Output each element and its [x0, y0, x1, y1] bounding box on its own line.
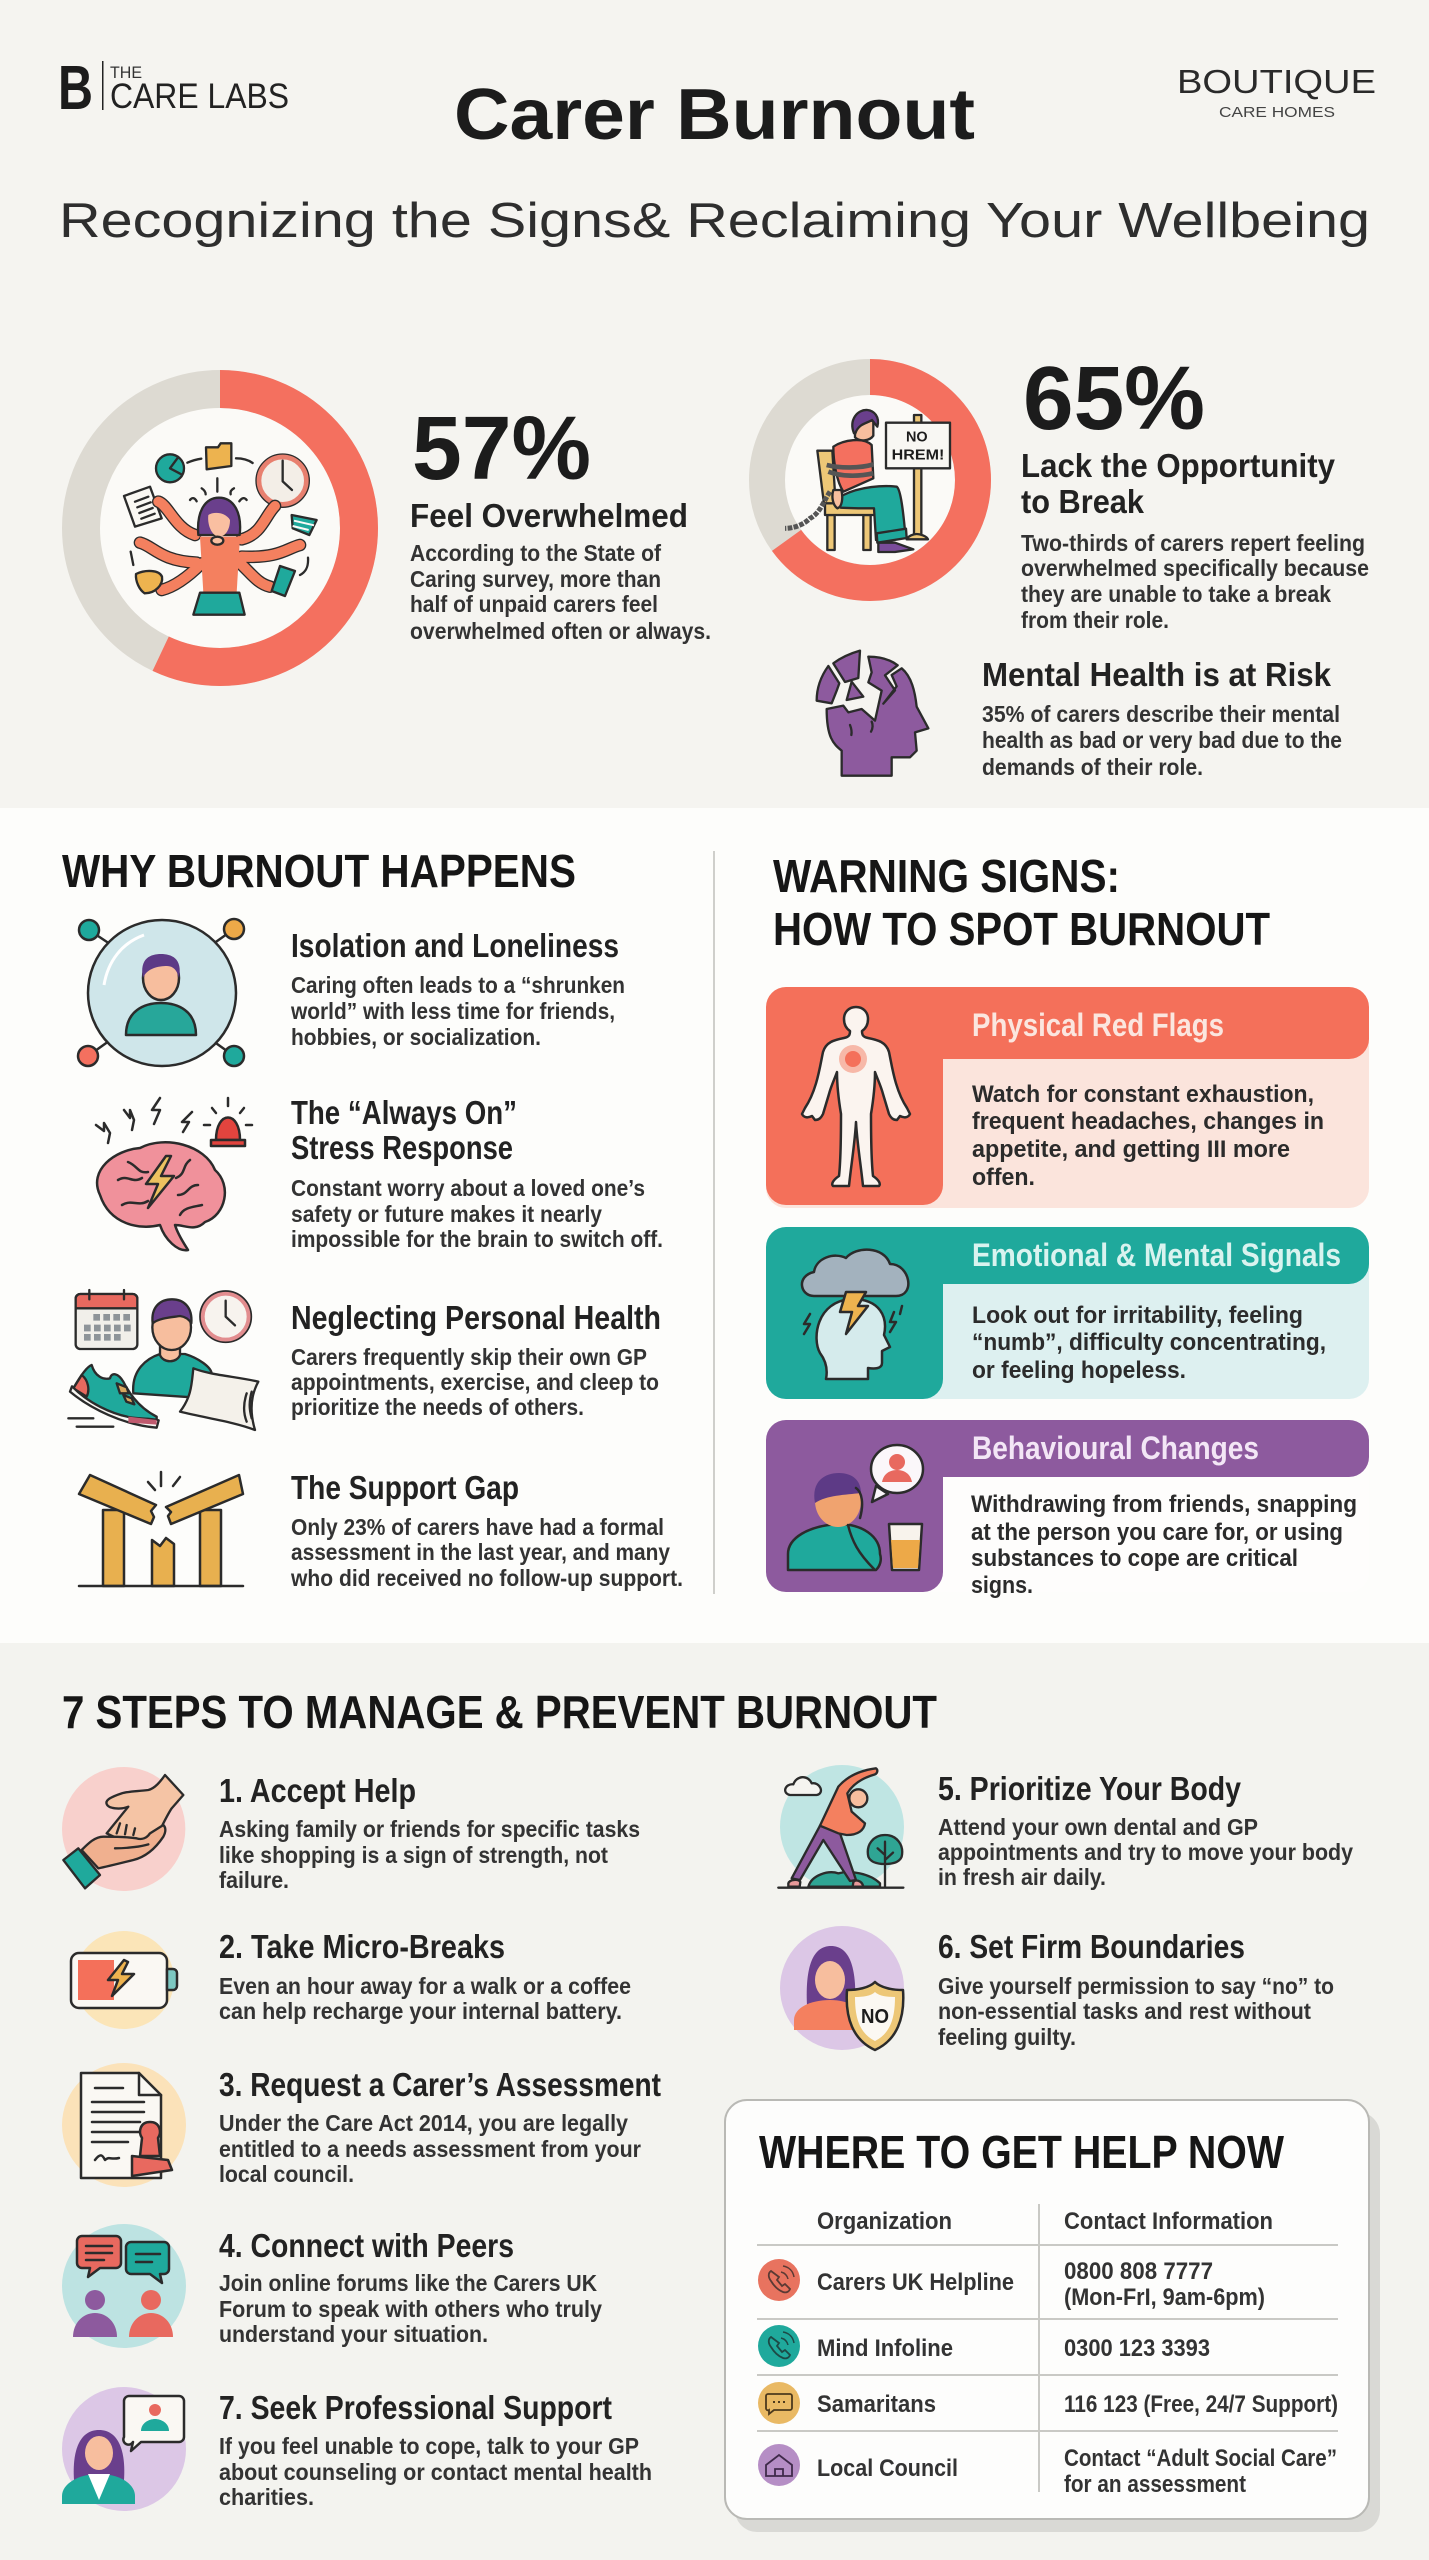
card title: Behavioural Changes	[972, 1430, 1259, 1466]
step text	[219, 2433, 652, 2510]
row: Local Council: Local Council	[817, 2455, 958, 2482]
description: overwhelmed specifically because	[1021, 555, 1369, 581]
icon: person in bubble	[78, 919, 244, 1066]
icon: cracked head	[817, 651, 928, 776]
title: Carer Burnout	[454, 75, 975, 155]
label: Feel Overwhelmed: Feel Overwhelmed	[410, 497, 688, 534]
icon: person tied to chair	[785, 410, 950, 552]
panel: seven steps	[0, 1643, 1429, 2560]
label: Lack the Opportunity to Break: to Break	[1021, 483, 1145, 520]
description	[410, 540, 711, 644]
card title: Emotional & Mental Signals	[972, 1237, 1341, 1273]
description	[290, 972, 625, 1050]
step text: non-essential tasks and rest without	[938, 1998, 1311, 2024]
stat: 57% feel overwhelmed	[81, 389, 711, 667]
step text: Join online forums like the Carers UK	[219, 2270, 597, 2296]
logo: The Care Labs: CARE LABS	[110, 77, 289, 116]
step title: 3. Request a Carer’s Assessment	[219, 2066, 661, 2103]
step 5	[778, 1765, 1353, 1890]
description: Caring often leads to a “shrunken	[291, 972, 625, 998]
step 7	[62, 2387, 652, 2511]
step 1	[62, 1767, 640, 1893]
table header	[817, 2208, 1273, 2235]
stat: mental health at risk	[817, 651, 1342, 780]
icon: counsellor	[62, 2387, 186, 2511]
step text: Under the Care Act 2014, you are legally	[219, 2110, 628, 2136]
description	[982, 701, 1342, 780]
icon: broken bridge	[79, 1472, 243, 1586]
heading: 7 steps: 7 STEPS TO MANAGE & PREVENT BURNOUT	[62, 1686, 937, 1738]
card text: Look out for irritability, feeling	[972, 1302, 1303, 1329]
card text	[972, 1081, 1324, 1191]
card text: “numb”, difficulty concentrating,	[972, 1329, 1326, 1356]
heading: why burnout happens: WHY BURNOUT HAPPENS	[62, 845, 576, 897]
icon: calendar, carer, clock, shoe, pillow	[68, 1290, 258, 1430]
step title: 7. Seek Professional Support	[219, 2389, 612, 2426]
step text: understand your situation.	[219, 2321, 488, 2347]
step 3	[62, 2063, 661, 2187]
step text: Even an hour away for a walk or a coffee	[219, 1973, 631, 1999]
row: Carers UK Helpline: Carers UK Helpline	[817, 2269, 1014, 2296]
row: Samaritans	[758, 2382, 1338, 2424]
item: neglecting personal health	[68, 1290, 661, 1430]
card text: signs.	[971, 1572, 1033, 1599]
description	[291, 1344, 659, 1420]
step text	[219, 1816, 640, 1893]
row: Samaritans: Samaritans	[817, 2391, 936, 2418]
step text: Give yourself permission to say “no” to	[938, 1973, 1334, 1999]
icon: person tied to chair: NO	[906, 430, 928, 446]
step title: 4. Connect with Peers	[219, 2227, 514, 2264]
description: impossible for the brain to switch off.	[291, 1226, 663, 1252]
description: Carers frequently skip their own GP	[291, 1344, 647, 1370]
subtitle: Recognizing the Signs& Reclaiming Your Wellbeing	[59, 194, 1370, 248]
description	[1021, 530, 1369, 633]
description: According to the State of	[410, 540, 661, 566]
heading: warning signs: WARNING SIGNS:	[773, 850, 1120, 902]
row: Mind Infoline	[758, 2325, 1210, 2367]
label: Lack the Opportunity to Break: Lack the Opportunity	[1021, 447, 1336, 484]
row: Mind Infoline: 0300 123 3393	[1064, 2335, 1210, 2362]
step title: 2. Take Micro-Breaks	[219, 1928, 505, 1965]
icon: phone teal	[758, 2325, 800, 2367]
heading: Isolation and Loneliness	[291, 927, 619, 964]
step title: 6. Set Firm Boundaries	[938, 1928, 1245, 1965]
description	[290, 1514, 683, 1591]
step text: local council.	[219, 2161, 354, 2187]
item: isolation and loneliness	[78, 919, 625, 1066]
panel: statistics	[81, 349, 1369, 780]
card: physical red flags	[766, 987, 1369, 1208]
value: 57%: 57%	[412, 399, 591, 499]
icon: house	[758, 2444, 800, 2486]
logo: The Care Labs: B	[58, 54, 93, 123]
icon: woman with no shield: NO	[861, 2006, 889, 2028]
step text: entitled to a needs assessment from your	[219, 2136, 641, 2162]
donut chart: 65%	[767, 377, 973, 583]
step 2	[71, 1928, 631, 2029]
heading	[291, 1094, 517, 1166]
description: 35% of carers describe their mental	[982, 701, 1340, 727]
panel: header	[58, 54, 1376, 248]
panel: why burnout happens	[0, 808, 1429, 1643]
logo: The Care Labs: THE	[110, 63, 142, 82]
label: Lack the Opportunity to Break	[1021, 447, 1336, 520]
icon: stretching person	[778, 1765, 904, 1889]
icon: person tied to chair: HREM!	[892, 447, 944, 463]
step text	[219, 1973, 631, 2024]
description: assessment in the last year, and many	[291, 1539, 670, 1565]
logo: Boutique Care Homes: BOUTIQUE	[1177, 63, 1376, 100]
step text	[938, 1973, 1334, 2050]
row: Carers UK Helpline: (Mon-FrI, 9am-6pm)	[1064, 2284, 1265, 2311]
step text	[938, 1814, 1353, 1890]
step text: Asking family or friends for specific tasks	[219, 1816, 640, 1842]
heading: warning signs	[773, 850, 1270, 955]
heading: where to get help now: WHERE TO GET HELP NOW	[759, 2126, 1284, 2178]
value: 65%: 65%	[1023, 349, 1205, 449]
item: always on stress response	[96, 1094, 663, 1252]
label: Mental Health is at Risk: Mental Health is at Risk	[982, 656, 1332, 693]
description: who did received no follow-up support.	[290, 1565, 683, 1591]
card text	[971, 1491, 1357, 1599]
step text: like shopping is a sign of strength, not	[219, 1842, 608, 1868]
step text	[219, 2110, 641, 2187]
description: Two-thirds of carers repert feeling	[1021, 530, 1365, 556]
logo: Boutique Care Homes	[1177, 63, 1376, 121]
description: appointments, exercise, and cleep to	[291, 1369, 659, 1395]
description: overwhelmed often or always.	[410, 618, 711, 644]
step text: If you feel unable to cope, talk to your GP	[219, 2433, 639, 2459]
row: Local Council: Contact “Adult Social Care”	[1064, 2445, 1337, 2472]
description: Caring survey, more than	[410, 566, 661, 592]
description: safety or future makes it nearly	[291, 1201, 602, 1227]
description: demands of their role.	[982, 754, 1203, 780]
row: Samaritans: 116 123 (Free, 24/7 Support)	[1064, 2391, 1338, 2418]
icon: brain with alarm	[96, 1098, 252, 1250]
description: from their role.	[1021, 607, 1169, 633]
card text: offen.	[972, 1164, 1035, 1191]
icon: withdrawn person with drink	[788, 1445, 923, 1570]
step 6	[780, 1926, 1334, 2050]
card text: Withdrawing from friends, snapping	[971, 1491, 1357, 1518]
step text: about counseling or contact mental health	[219, 2459, 652, 2485]
row: Local Council	[758, 2444, 1337, 2498]
description: half of unpaid carers feel	[410, 591, 658, 617]
icon: woman with no shield	[780, 1926, 904, 2050]
row: Mind Infoline: Mind Infoline	[817, 2335, 953, 2362]
step text: failure.	[219, 1867, 289, 1893]
description: hobbies, or socialization.	[291, 1024, 541, 1050]
description: Constant worry about a loved one’s	[291, 1175, 645, 1201]
heading: warning signs: HOW TO SPOT BURNOUT	[773, 903, 1270, 955]
table header: Contact Information	[1064, 2208, 1273, 2235]
card text: appetite, and getting III more	[972, 1136, 1290, 1163]
icon: assessment document and stamp	[62, 2063, 186, 2187]
logo: Boutique Care Homes: CARE HOMES	[1219, 104, 1335, 121]
step text	[219, 2270, 602, 2347]
table header: Organization	[817, 2208, 952, 2235]
card: behavioural changes	[766, 1420, 1369, 1599]
icon: body with pain spot	[802, 1007, 910, 1186]
step text: feeling guilty.	[938, 2024, 1076, 2050]
stat: 65% lack the opportunity to break	[767, 349, 1369, 633]
heading: The Support Gap	[291, 1469, 519, 1506]
step text: in fresh air daily.	[938, 1864, 1106, 1890]
step title: 5. Prioritize Your Body	[938, 1770, 1242, 1807]
panel: warning signs	[766, 850, 1369, 1599]
card: emotional and mental signals	[766, 1227, 1369, 1399]
description: they are unable to take a break	[1021, 581, 1331, 607]
donut chart: 57%	[81, 389, 359, 667]
description: health as bad or very bad due to the	[982, 727, 1342, 753]
logo: The Care Labs	[58, 54, 289, 123]
description: prioritize the needs of others.	[291, 1394, 584, 1420]
row: Local Council: for an assessment	[1064, 2471, 1246, 2498]
heading: The “Always On”	[291, 1094, 517, 1131]
card text: substances to cope are critical	[971, 1545, 1298, 1572]
card text: frequent headaches, changes in	[972, 1108, 1324, 1135]
icon: phone red	[758, 2259, 800, 2301]
heading: Neglecting Personal Health	[291, 1299, 661, 1336]
panel: where to get help now	[725, 2100, 1380, 2532]
item: support gap	[79, 1469, 683, 1591]
step text: Attend your own dental and GP	[938, 1814, 1258, 1840]
icon: multitasking woman	[124, 443, 317, 615]
icon: low battery	[71, 1931, 177, 2029]
icon: storm cloud over head	[802, 1250, 908, 1379]
card title: Physical Red Flags	[972, 1007, 1224, 1043]
description: Only 23% of carers have had a formal	[291, 1514, 664, 1540]
table: help contacts	[757, 2204, 1338, 2498]
row: Carers UK Helpline	[758, 2258, 1265, 2311]
card text: or feeling hopeless.	[972, 1357, 1186, 1384]
step title: 1. Accept Help	[219, 1772, 416, 1809]
icon: chat bubble	[758, 2382, 800, 2424]
step 4	[62, 2224, 602, 2348]
step text: Forum to speak with others who truly	[219, 2296, 602, 2322]
heading: Stress Response	[291, 1129, 513, 1166]
description: world” with less time for friends,	[290, 998, 615, 1024]
step text: can help recharge your internal battery.	[219, 1998, 622, 2024]
row: Carers UK Helpline: 0800 808 7777	[1064, 2258, 1213, 2285]
card text	[972, 1302, 1326, 1384]
step text: appointments and try to move your body	[938, 1839, 1353, 1865]
icon: peers talking	[62, 2224, 186, 2348]
step text: charities.	[219, 2484, 314, 2510]
card text: at the person you care for, or using	[971, 1519, 1343, 1546]
icon: helping hands	[62, 1767, 185, 1891]
card text: Watch for constant exhaustion,	[972, 1081, 1314, 1108]
description	[291, 1175, 663, 1252]
